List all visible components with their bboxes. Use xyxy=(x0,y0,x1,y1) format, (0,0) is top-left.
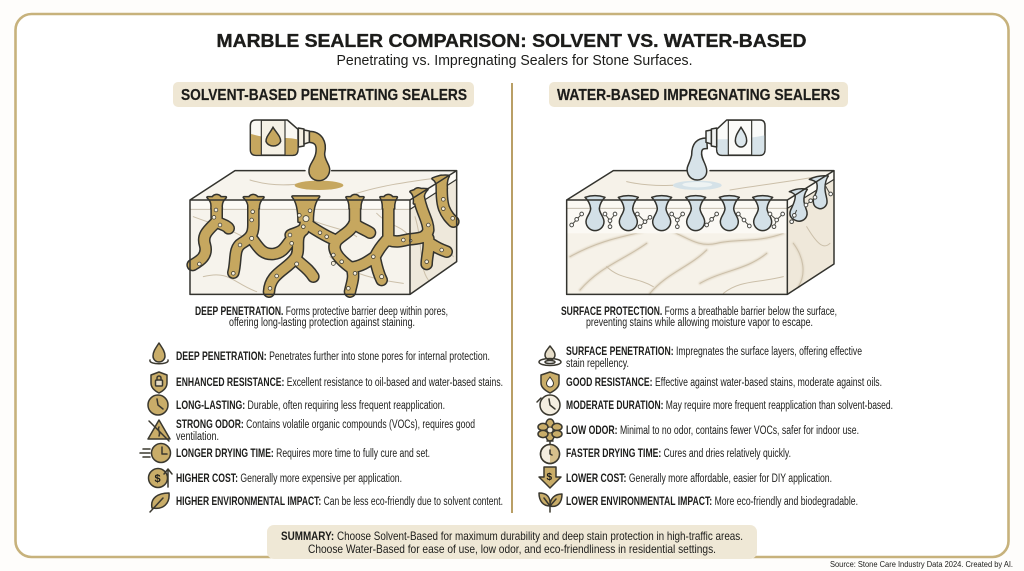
item: strong odor xyxy=(148,419,475,443)
item: deep penetration xyxy=(150,343,490,364)
item: strong odor: STRONG ODOR: Contains volatile organic compounds (VOCs), requires good xyxy=(176,419,475,431)
item: lower cost xyxy=(539,467,832,488)
item: higher environmental impact xyxy=(150,493,503,512)
heading: solvent-based xyxy=(173,82,474,107)
heading: water-based: WATER-BASED IMPREGNATING SEALERS xyxy=(557,87,840,104)
source note: Source: Stone Care Industry Data 2024. Created by AI. xyxy=(830,560,1013,569)
item: faster drying time xyxy=(540,441,791,464)
item: higher cost: $ xyxy=(154,473,161,485)
illustration: solvent penetrating marble block xyxy=(190,120,457,294)
item: higher cost: HIGHER COST: Generally more expensive per application. xyxy=(176,473,402,485)
center divider xyxy=(511,83,513,513)
item: strong odor: ventilation. xyxy=(176,431,219,443)
item: higher cost xyxy=(148,468,402,488)
caption: surface protection: SURFACE PROTECTION. Forms a breathable barrier below the surface, xyxy=(561,306,837,318)
item: surface penetration: SURFACE PENETRATION: Impregnates the surface layers, offering effective xyxy=(566,346,862,358)
item: deep penetration: DEEP PENETRATION: Penetrates further into stone pores for internal protection. xyxy=(176,351,490,363)
puddle xyxy=(673,181,722,190)
item: lower cost: LOWER COST: Generally more affordable, easier for DIY application. xyxy=(566,473,832,485)
caption: deep penetration xyxy=(195,306,448,329)
summary callout xyxy=(267,525,757,559)
summary callout: Choose Water-Based for ease of use, low odor, and eco-friendliness in residential settings. xyxy=(308,542,716,556)
heading: water-based xyxy=(549,82,848,107)
subtitle: Penetrating vs. Impregnating Sealers for Stone Surfaces. xyxy=(336,53,692,69)
item: enhanced resistance xyxy=(151,372,503,393)
bottle xyxy=(250,120,309,155)
item: moderate duration xyxy=(537,395,893,415)
item: faster drying time: FASTER DRYING TIME: Cures and dries relatively quickly. xyxy=(566,448,791,460)
panel: water-based xyxy=(537,82,893,512)
item: good resistance: GOOD RESISTANCE: Effective against water-based stains, moderate against oils. xyxy=(566,377,882,389)
stream and drop xyxy=(687,138,707,180)
caption: deep penetration: DEEP PENETRATION. Forms protective barrier deep within pores, xyxy=(195,306,448,318)
panel: solvent-based xyxy=(140,82,503,512)
item: good resistance xyxy=(541,372,882,393)
caption: deep penetration: offering long-lasting protection against staining. xyxy=(229,317,415,329)
item: longer drying time: LONGER DRYING TIME: Requires more time to fully cure and set. xyxy=(176,448,430,460)
item: lower environmental impact: LOWER ENVIRONMENTAL IMPACT: More eco-friendly and biodegradable. xyxy=(566,496,858,508)
item: surface penetration xyxy=(539,346,862,370)
item: moderate duration: MODERATE DURATION: May require more frequent reapplication than solvent-based. xyxy=(566,400,893,412)
item: low odor: LOW ODOR: Minimal to no odor, contains fewer VOCs, safer for indoor use. xyxy=(566,425,859,437)
pore droplets xyxy=(585,176,828,231)
item: lower cost: $ xyxy=(546,472,552,483)
summary callout: SUMMARY: Choose Solvent-Based for maximum durability and deep stain protection in high-traffic areas. xyxy=(281,529,743,543)
item: lower environmental impact xyxy=(539,493,858,512)
title: MARBLE SEALER COMPARISON: SOLVENT VS. WATER-BASED xyxy=(216,30,806,51)
item: low odor xyxy=(538,419,859,441)
bottle xyxy=(706,120,765,155)
illustration: water-based marble block xyxy=(567,120,834,294)
pore network xyxy=(193,176,454,292)
item: higher environmental impact: HIGHER ENVIRONMENTAL IMPACT: Can be less eco-friendly due to solvent content. xyxy=(176,496,503,508)
list: water-based properties xyxy=(537,346,893,512)
item: enhanced resistance: ENHANCED RESISTANCE: Excellent resistance to oil-based and water-based stains. xyxy=(176,377,503,389)
item: long-lasting: LONG-LASTING: Durable, often requiring less frequent reapplication. xyxy=(176,400,445,412)
stream and drop xyxy=(309,131,330,181)
caption: surface protection: preventing stains while allowing moisture vapor to escape. xyxy=(586,317,813,329)
molecules xyxy=(570,185,832,228)
list: solvent-based properties xyxy=(140,343,503,512)
item: long-lasting xyxy=(148,395,445,415)
puddle xyxy=(295,181,343,190)
caption: surface protection xyxy=(561,306,837,329)
item: surface penetration: stain repellency. xyxy=(566,358,629,370)
item: longer drying time xyxy=(140,444,430,462)
heading: solvent-based: SOLVENT-BASED PENETRATING SEALERS xyxy=(181,87,467,104)
